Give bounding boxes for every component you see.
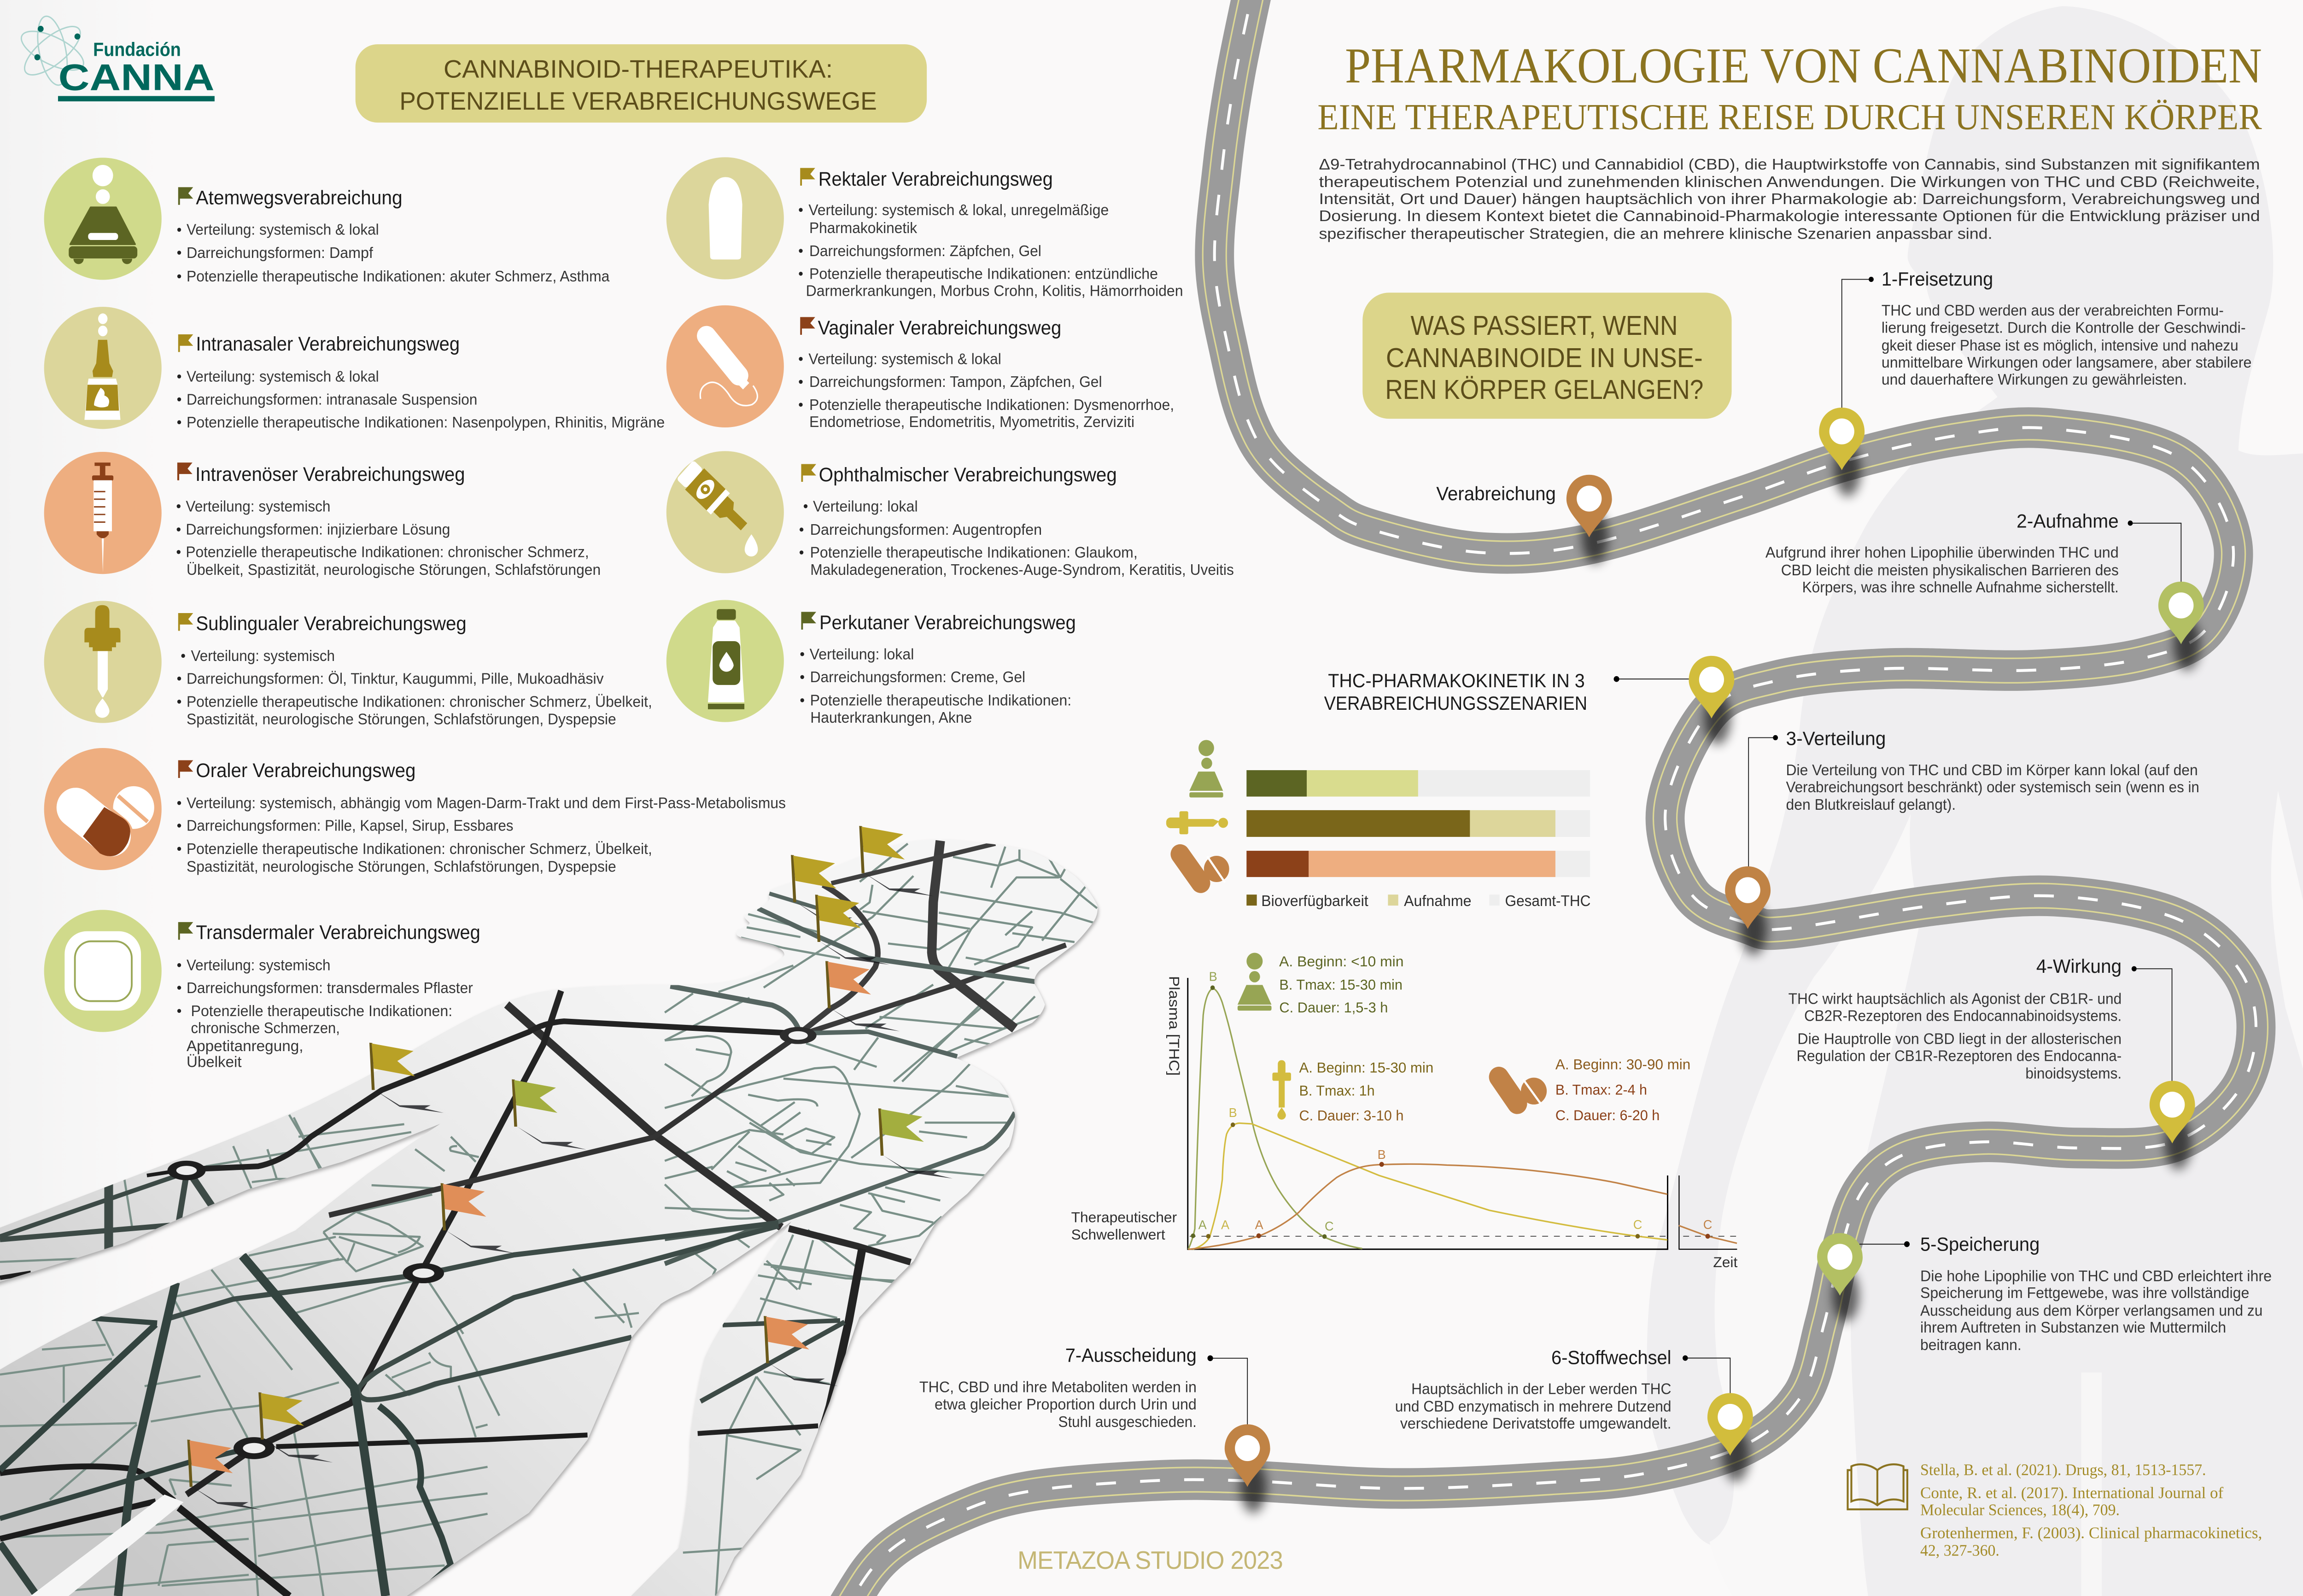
icon: dropper [44, 601, 162, 723]
step 6: Stoffwechsel [1395, 1347, 1688, 1432]
icon: book [1847, 1464, 1907, 1509]
label: Verabreichung: Verabreichung [1436, 483, 1556, 504]
plasma concentration chart [1071, 969, 1738, 1270]
panel: Intranasaler Verabreichungsweg: Intranasaler Verabreichungsweg [196, 333, 460, 355]
references: Conte, R. et al. (2017). International Journal of [1920, 1485, 2224, 1502]
curve markers: B [1378, 1147, 1386, 1162]
step 3: Verteilung: Verabreichungsort beschränkt) oder systemisch sein (wenn es in [1786, 779, 2199, 795]
curve: sublingual [1192, 1123, 1667, 1249]
step 3: Verteilung [1773, 728, 2199, 813]
oral timings: C. Dauer: 6-20 h [1555, 1107, 1660, 1123]
step 4: Wirkung: Regulation der CB1R-Rezeptoren des Endocanna- [1797, 1047, 2122, 1064]
panel: Atemwegsverabreichung: Atemwegsverabreichung [196, 187, 403, 209]
flag: orange pelvis [187, 1439, 262, 1510]
curve markers: C [1633, 1217, 1642, 1232]
sublingual timings: C. Dauer: 3-10 h [1299, 1107, 1404, 1124]
panel: Oraler Verabreichungsweg: Oraler Verabreichungsweg [196, 759, 415, 781]
panel: Ophthalmischer Verabreichungsweg: Makuladegeneration, Trockenes-Auge-Syndrom, Keratitis, Uveitis [810, 561, 1234, 578]
flag: yellow 2 [791, 855, 865, 925]
heading: THC pharmacokinetics [1324, 670, 1619, 714]
pin: THC-Pharmakokinetik [1689, 656, 1734, 744]
icon: suppository [666, 157, 784, 280]
panel: Ophthalmischer Verabreichungsweg: Ophthalmischer Verabreichungsweg [819, 463, 1117, 485]
intro text: Dosierung. In diesem Kontext bietet die Cannabinoid-Pharmakologie interessante Optionen für die Entwicklung präziser und [1319, 208, 2260, 224]
oral timings [1499, 1056, 1690, 1123]
panel: Intravenöser Verabreichungsweg: Intravenöser Verabreichungsweg [195, 463, 465, 485]
panel: Rektaler Verabreichungsweg: Verteilung: systemisch & lokal, unregelmäßige [808, 201, 1109, 218]
panel: Transdermaler Verabreichungsweg: Verteilung: systemisch [187, 957, 330, 974]
flag: yellow hip [258, 1392, 333, 1462]
logo: Fundación CANNA: Fundación [93, 39, 181, 60]
panel: Vaginaler Verabreichungsweg: Darreichungsformen: Tampon, Zäpfchen, Gel [809, 374, 1102, 390]
curve markers: C [1325, 1219, 1334, 1233]
references: Grotenhermen, F. (2003). Clinical pharmacokinetics, [1920, 1525, 2262, 1542]
icon: pills small [1180, 854, 1229, 883]
panel: Transdermaler Verabreichungsweg: Übelkeit [187, 1053, 242, 1070]
panel: Transdermaler Verabreichungsweg: Darreichungsformen: transdermales Pflaster [187, 979, 473, 996]
panel: Intravenöser Verabreichungsweg: Darreichungsformen: injizierbare Lösung [186, 521, 450, 538]
axis labels: Plasma [THC] [1166, 976, 1182, 1076]
step 2: Aufnahme: Körpers, was ihre schnelle Aufnahme sicherstellt. [1802, 579, 2119, 596]
flag: yellow top [859, 826, 934, 896]
pins on road [1225, 408, 2204, 1513]
step 4: Wirkung: binoidsystems. [2025, 1065, 2122, 1082]
step 1: Freisetzung: THC und CBD werden aus der verabreichten Formu- [1882, 302, 2224, 319]
plasma concentration chart: Schwellenwert [1071, 1227, 1165, 1243]
inhalation timings: C. Dauer: 1,5-3 h [1279, 1000, 1388, 1016]
step 1: Freisetzung: 1-Freisetzung [1882, 268, 1993, 290]
panel: Vaginaler Verabreichungsweg: Vaginaler Verabreichungsweg [818, 316, 1061, 339]
intro text: Intensität, Ort und Dauer) hängen hauptsächlich von ihrer Pharmakologie ab: Darreichungsform, Verabreichungsweg und [1319, 190, 2260, 207]
panel: Perkutaner Verabreichungsweg: Potenzielle therapeutische Indikationen: [810, 692, 1071, 709]
pin: 6-Stoffwechsel [1707, 1393, 1753, 1482]
oral timings: B. Tmax: 2-4 h [1555, 1082, 1647, 1098]
panel: Ophthalmischer Verabreichungsweg: Darreichungsformen: Augentropfen [810, 521, 1042, 538]
panel: Intravenöser Verabreichungsweg [44, 452, 601, 578]
step 1: Freisetzung: lierung freigesetzt. Durch die Kontrolle der Geschwindi- [1882, 319, 2246, 336]
panel: Oraler Verabreichungsweg: Potenzielle therapeutische Indikationen: chronischer Schmerz, Übelkeit, [187, 840, 652, 857]
step 1: Freisetzung [1869, 268, 2251, 388]
intro text: spezifischer therapeutischer Strategien, die an mehrere klinische Szenarien anpassbar sind. [1319, 225, 1993, 242]
panel: Rektaler Verabreichungsweg: Potenzielle therapeutische Indikationen: entzündliche [809, 265, 1158, 282]
icon: capsule and tablet [44, 748, 162, 870]
title [1317, 38, 2262, 137]
step 7: Ausscheidung: Stuhl ausgeschieden. [1058, 1413, 1197, 1430]
panel: Vaginaler Verabreichungsweg: Potenzielle therapeutische Indikationen: Dysmenorrhoe, [809, 396, 1174, 413]
step 6: Stoffwechsel: verschiedene Derivatstoffe umgewandelt. [1400, 1415, 1672, 1432]
sublingual timings: A. Beginn: 15-30 min [1299, 1059, 1433, 1076]
heading: THC pharmacokinetics: VERABREICHUNGSSZENARIEN [1324, 692, 1587, 714]
logo: Fundación CANNA [16, 13, 215, 101]
panel: Rektaler Verabreichungsweg: Darmerkrankungen, Morbus Crohn, Kolitis, Hämorrhoiden [806, 282, 1183, 299]
icon: inhaler [44, 158, 162, 280]
panel: Rektaler Verabreichungsweg: Darreichungsformen: Zäpfchen, Gel [809, 242, 1041, 259]
step 5: Speicherung: beitragen kann. [1920, 1337, 2022, 1353]
panel: Sublingualer Verabreichungsweg: Verteilung: systemisch [191, 648, 335, 664]
panel: Perkutaner Verabreichungsweg: Hauterkrankungen, Akne [810, 709, 972, 726]
step 7: Ausscheidung: etwa gleicher Proportion durch Urin und [935, 1396, 1197, 1413]
heading pill: potential administration routes [356, 44, 927, 123]
legend [1246, 893, 1590, 909]
body map illustration [0, 840, 1098, 1596]
title: EINE THERAPEUTISCHE REISE DURCH UNSEREN KÖRPER [1317, 96, 2262, 137]
pin: 2-Aufnahme [2158, 582, 2204, 670]
heading: THC pharmacokinetics: THC-PHARMAKOKINETIK IN 3 [1328, 670, 1585, 691]
intro text [1319, 156, 2260, 242]
pin: 4-Wirkung [2150, 1081, 2195, 1169]
panel: Atemwegsverabreichung: Verteilung: systemisch & lokal [187, 221, 379, 238]
panel: Intranasaler Verabreichungsweg: Verteilung: systemisch & lokal [187, 368, 379, 385]
step 5: Speicherung: ihrem Auftreten in Substanzen wie Muttermilch [1920, 1319, 2226, 1336]
curve: oral [1188, 1164, 1737, 1249]
step 5: Speicherung: Die hohe Lipophilie von THC und CBD erleichtert ihre [1920, 1268, 2272, 1285]
panel: Vaginaler Verabreichungsweg: Verteilung: systemisch & lokal [808, 351, 1001, 368]
panel: Perkutaner Verabreichungsweg: Verteilung: lokal [810, 646, 914, 663]
step 5: Speicherung: Ausscheidung aus dem Körper verlangsamen und zu [1920, 1302, 2262, 1319]
step 5: Speicherung: Speicherung im Fettgewebe, was ihre vollständige [1920, 1285, 2249, 1301]
icon: pills [1499, 1077, 1547, 1105]
step 1: Freisetzung: und dauerhaftere Wirkungen zu gewährleisten. [1882, 371, 2187, 388]
legend: Gesamt-THC [1505, 893, 1590, 909]
curve markers: B [1209, 969, 1217, 984]
step 2: Aufnahme [1765, 510, 2133, 596]
map flags [187, 826, 953, 1510]
legend: Bioverfügbarkeit [1261, 893, 1368, 909]
panel: Transdermaler Verabreichungsweg: chronische Schmerzen, [191, 1020, 340, 1036]
step 2: Aufnahme: 2-Aufnahme [2017, 510, 2119, 532]
sublingual timings [1272, 1059, 1433, 1124]
step 4: Wirkung [1789, 956, 2137, 1082]
callout pill: what happens [1362, 292, 1732, 419]
step 3: Verteilung: 3-Verteilung [1786, 728, 1886, 749]
winding road [840, 0, 2256, 1596]
step 4: Wirkung: 4-Wirkung [2036, 956, 2122, 977]
panel: Oraler Verabreichungsweg: Verteilung: systemisch, abhängig vom Magen-Darm-Trakt und dem First-Pass-Metabolismus [187, 795, 786, 812]
sublingual timings: B. Tmax: 1h [1299, 1082, 1375, 1099]
panel: Oraler Verabreichungsweg: Darreichungsformen: Pille, Kapsel, Sirup, Essbares [187, 817, 513, 834]
bar chart: bioavailability [1166, 740, 1590, 909]
flag: orange arm [764, 1316, 838, 1386]
panel: Intranasaler Verabreichungsweg: Darreichungsformen: intranasale Suspension [187, 391, 477, 408]
icon: patch [44, 910, 162, 1032]
step 3: Verteilung: den Blutkreislauf gelangt). [1786, 796, 1956, 813]
panel: Transdermaler Verabreichungsweg: Appetitanregung, [187, 1037, 303, 1054]
panel: Transdermaler Verabreichungsweg: Potenzielle therapeutische Indikationen: [191, 1002, 452, 1019]
panel: Intravenöser Verabreichungsweg: Übelkeit, Spastizität, neurologische Störungen, Schlafstörungen [187, 561, 601, 578]
panel: Transdermaler Verabreichungsweg: Transdermaler Verabreichungsweg [196, 921, 480, 943]
references [1847, 1462, 2262, 1560]
step 2: Aufnahme: CBD leicht die meisten physikalischen Barrieren des [1781, 561, 2119, 579]
panel: Rektaler Verabreichungsweg: Rektaler Verabreichungsweg [818, 168, 1053, 190]
plasma concentration chart: Therapeutischer [1071, 1209, 1177, 1226]
intro text: Δ9-Tetrahydrocannabinol (THC) und Cannabidiol (CBD), die Hauptwirkstoffe von Cannabis, sind Substanzen mit signifikantem [1319, 156, 2260, 173]
title: PHARMAKOLOGIE VON CANNABINOIDEN [1345, 38, 2262, 94]
icon: tampon [666, 305, 784, 427]
oral timings: A. Beginn: 30-90 min [1555, 1056, 1690, 1072]
connector lines [1210, 280, 2181, 1429]
flag: yellow 3 [815, 894, 889, 965]
intro text: therapeutischem Potenzial und zunehmenden klinischen Anwendungen. Die Wirkungen von THC und CBD (Reichweite, [1319, 173, 2260, 190]
step 4: Wirkung: Die Hauptrolle von CBD liegt in der allosterischen [1797, 1030, 2122, 1047]
panel: Rektaler Verabreichungsweg [666, 157, 1183, 299]
heading pill: potential administration routes: POTENZIELLE VERABREICHUNGSWEGE [399, 87, 877, 115]
pin: Verabreichung [1567, 475, 1612, 563]
curve: inhalation [1188, 988, 1362, 1249]
curve markers: A [1221, 1217, 1230, 1232]
panel: Ophthalmischer Verabreichungsweg: Potenzielle therapeutische Indikationen: Glaukom, [810, 544, 1138, 561]
inhalation timings: A. Beginn: <10 min [1279, 953, 1404, 970]
panel: Ophthalmischer Verabreichungsweg: Verteilung: lokal [813, 498, 918, 514]
pin: 7-Ausscheidung [1225, 1424, 1270, 1513]
panel: Vaginaler Verabreichungsweg [666, 305, 1174, 430]
icon: eye drops [666, 451, 784, 573]
legend: Aufnahme [1404, 893, 1472, 909]
icon: dropper [1272, 1060, 1291, 1120]
panel: Intravenöser Verabreichungsweg: Verteilung: systemisch [186, 498, 330, 514]
panel: Oraler Verabreichungsweg: Spastizität, neurologische Störungen, Schlafstörungen, Dyspepsie [187, 858, 616, 875]
inhalation timings: B. Tmax: 15-30 min [1279, 976, 1403, 993]
inhalation timings [1238, 953, 1404, 1016]
step 6: Stoffwechsel: 6-Stoffwechsel [1551, 1347, 1672, 1368]
icon: nasal spray [44, 307, 162, 429]
flag: yellow arm [369, 1043, 444, 1113]
panel: Atemwegsverabreichung [44, 158, 610, 285]
references: Stella, B. et al. (2021). Drugs, 81, 1513-1557. [1920, 1462, 2206, 1479]
icon: syringe [44, 452, 162, 574]
step 4: Wirkung: THC wirkt hauptsächlich als Agonist der CB1R- und [1789, 990, 2122, 1007]
panel: Sublingualer Verabreichungsweg [44, 601, 652, 727]
curve markers: B [1229, 1105, 1237, 1120]
step 2: Aufnahme: Aufgrund ihrer hohen Lipophilie überwinden THC und [1765, 544, 2119, 561]
step 5: Speicherung [1904, 1234, 2272, 1353]
panel: Oraler Verabreichungsweg [44, 748, 786, 875]
panel: Sublingualer Verabreichungsweg: Sublingualer Verabreichungsweg [196, 612, 467, 634]
references: Molecular Sciences, 18(4), 709. [1920, 1502, 2120, 1519]
curve markers: A [1255, 1217, 1263, 1232]
panel: Sublingualer Verabreichungsweg: Spastizität, neurologische Störungen, Schlafstörungen, Dyspepsie [187, 711, 616, 727]
plasma concentration chart: Zeit [1713, 1254, 1738, 1270]
step 7: Ausscheidung [919, 1345, 1213, 1430]
logo: Fundación CANNA: CANNA [58, 56, 215, 98]
icon: inhaler [1238, 953, 1272, 1011]
pin: 1-Freisetzung [1819, 408, 1865, 496]
icon: dropper small [1166, 811, 1228, 834]
panel: Perkutaner Verabreichungsweg: Darreichungsformen: Creme, Gel [810, 669, 1025, 685]
panel: Vaginaler Verabreichungsweg: Endometriose, Endometritis, Myometritis, Zerviziti [809, 413, 1134, 430]
panel: Sublingualer Verabreichungsweg: Potenzielle therapeutische Indikationen: chronischer Schmerz, Übelkeit, [187, 693, 652, 710]
pin: 3-Verteilung [1725, 866, 1771, 955]
panel: Sublingualer Verabreichungsweg: Darreichungsformen: Öl, Tinktur, Kaugummi, Pille, Mukoadhäsiv [187, 670, 604, 687]
map roads [0, 841, 1066, 1596]
curve markers: C [1703, 1217, 1712, 1232]
step 3: Verteilung: Die Verteilung von THC und CBD im Körper kann lokal (auf den [1786, 761, 2198, 778]
flag: green shoulder [878, 1108, 953, 1179]
references: 42, 327-360. [1920, 1542, 1999, 1560]
curve markers [1191, 969, 1712, 1239]
callout pill: what happens: REN KÖRPER GELANGEN? [1385, 374, 1703, 405]
flag: orange abdomen [441, 1183, 515, 1253]
heading pill: potential administration routes: CANNABINOID-THERAPEUTIKA: [444, 55, 833, 83]
icon: cream tube [666, 600, 784, 722]
callout pill: what happens: WAS PASSIERT, WENN [1411, 310, 1678, 341]
panel: Rektaler Verabreichungsweg: Pharmakokinetik [809, 219, 918, 236]
panel: Intranasaler Verabreichungsweg: Potenzielle therapeutische Indikationen: Nasenpolypen, Rhinitis, Migräne [187, 414, 665, 431]
panel: Atemwegsverabreichung: Potenzielle therapeutische Indikationen: akuter Schmerz, Asthma [187, 268, 610, 285]
panel: Perkutaner Verabreichungsweg: Perkutaner Verabreichungsweg [819, 611, 1076, 633]
step 6: Stoffwechsel: und CBD enzymatisch in mehrere Dutzend [1395, 1398, 1672, 1415]
step 5: Speicherung: 5-Speicherung [1920, 1234, 2040, 1255]
background human silhouette [1647, 6, 2303, 1596]
step 7: Ausscheidung: 7-Ausscheidung [1065, 1345, 1197, 1366]
panel: Perkutaner Verabreichungsweg [666, 600, 1076, 726]
panel: Transdermaler Verabreichungsweg [44, 910, 480, 1070]
panel: Atemwegsverabreichung: Darreichungsformen: Dampf [187, 245, 374, 261]
map junction nodes [168, 1027, 817, 1459]
flag: green chest [512, 1079, 586, 1150]
pin: 5-Speicherung [1817, 1233, 1863, 1321]
panel: Intranasaler Verabreichungsweg [44, 307, 665, 431]
credit: Metazoa Studio: METAZOA STUDIO 2023 [1017, 1546, 1283, 1574]
flag: orange neck [825, 961, 900, 1031]
icon: inhaler small [1189, 740, 1223, 797]
step 6: Stoffwechsel: Hauptsächlich in der Leber werden THC [1411, 1380, 1672, 1397]
step 4: Wirkung: CB2R-Rezeptoren des Endocannabinoidsystems. [1804, 1007, 2122, 1024]
callout pill: what happens: CANNABINOIDE IN UNSE- [1386, 343, 1703, 373]
panel: Ophthalmischer Verabreichungsweg [666, 451, 1234, 578]
step 7: Ausscheidung: THC, CBD und ihre Metaboliten werden in [919, 1379, 1197, 1396]
step 1: Freisetzung: unmittelbare Wirkungen oder langsamere, aber stabilere [1882, 354, 2251, 371]
step 1: Freisetzung: gkeit dieser Phase ist es möglich, intensive und nahezu [1882, 337, 2239, 354]
panel: Intravenöser Verabreichungsweg: Potenzielle therapeutische Indikationen: chronischer Schmerz, [186, 544, 589, 561]
curve markers: A [1198, 1217, 1207, 1232]
